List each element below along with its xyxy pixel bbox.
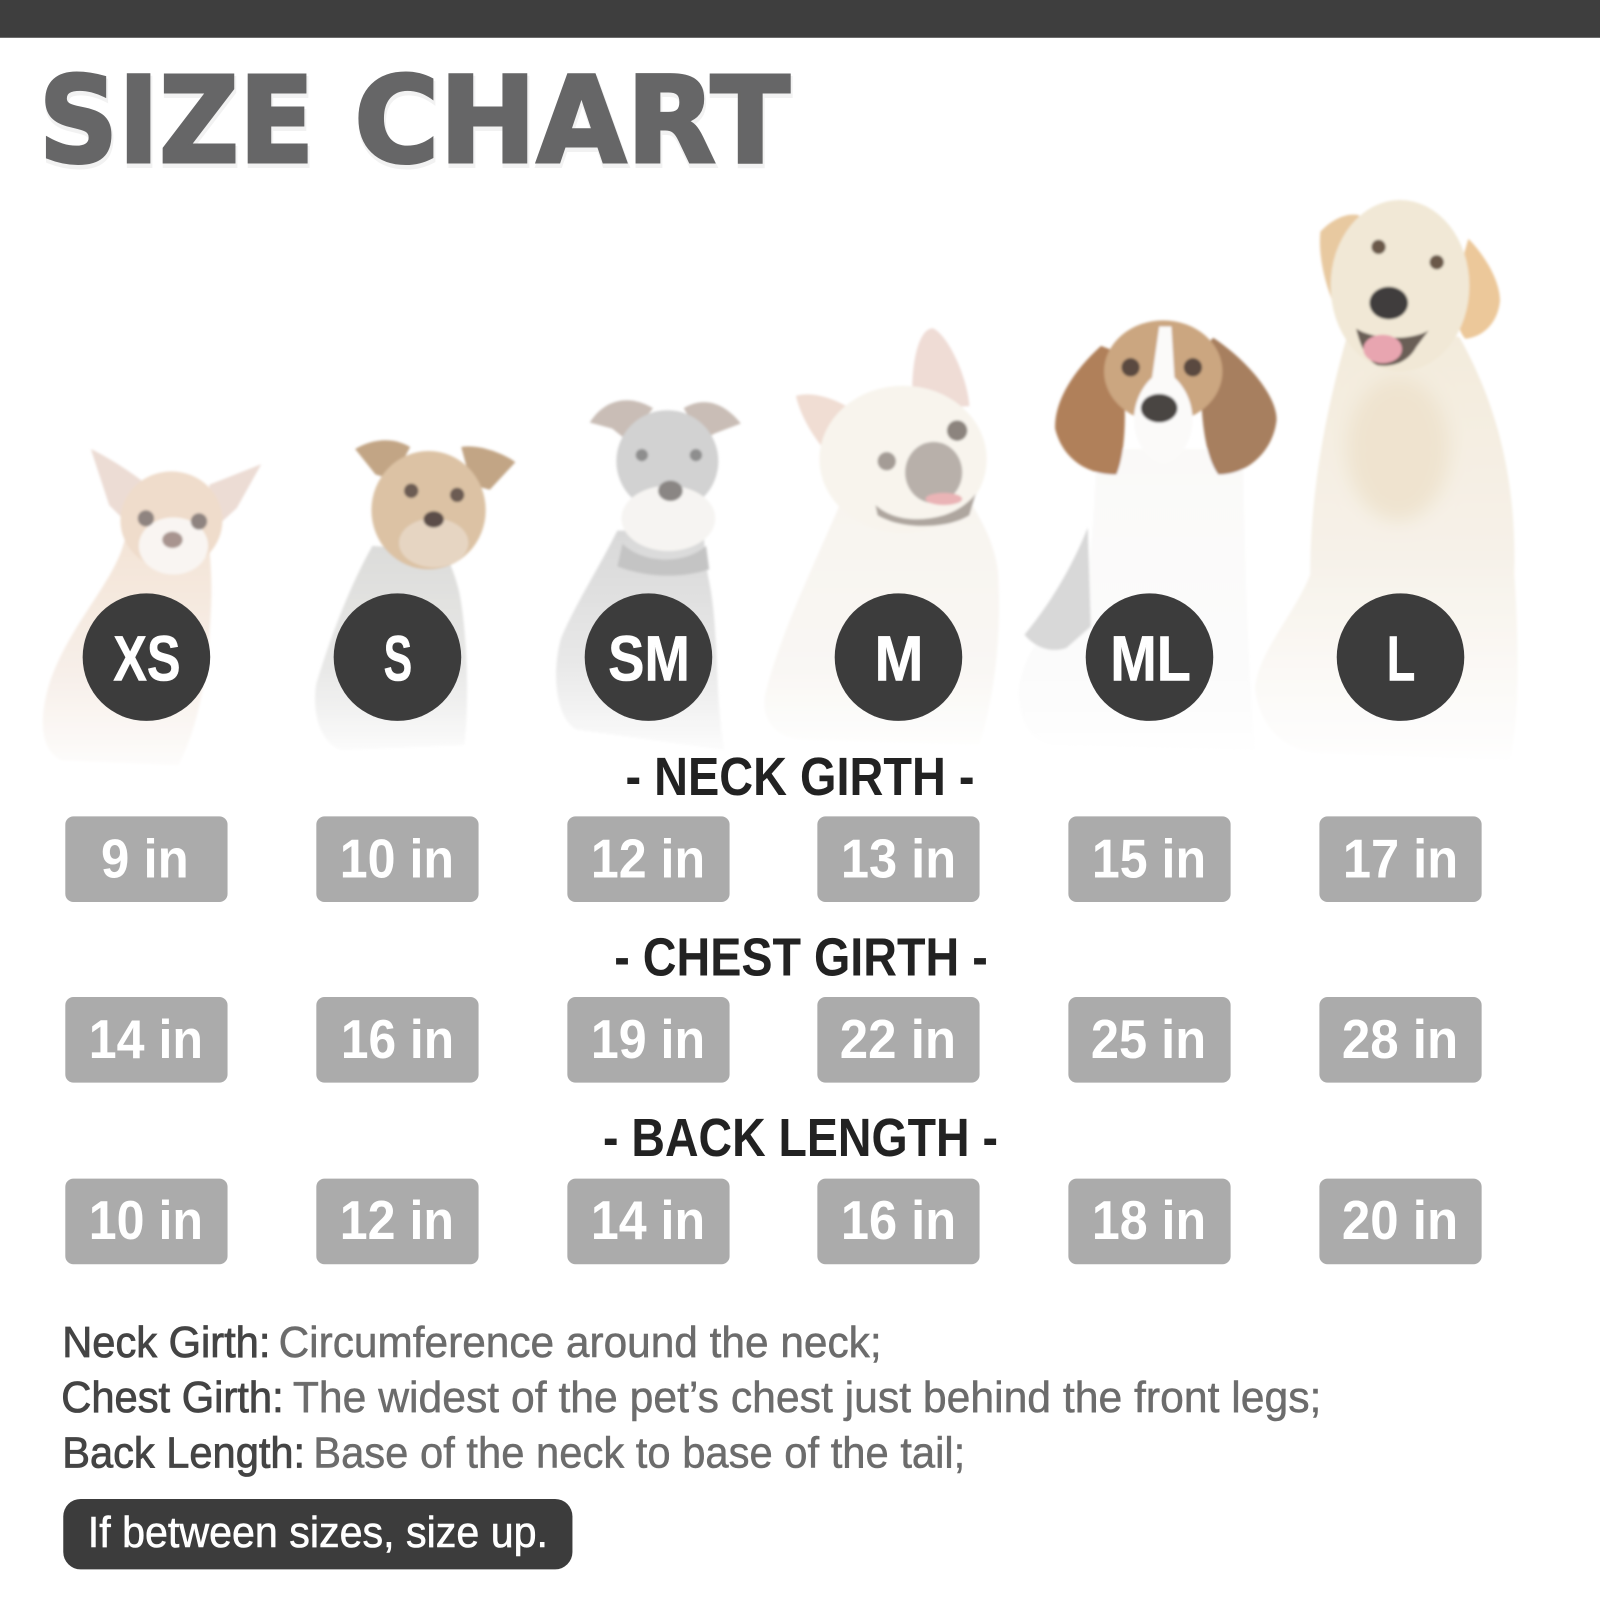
heading: chest girth: - CHEST GIRTH - [614,928,988,988]
back ML: 18 in [1092,1189,1206,1251]
back ML [1068,1179,1231,1264]
callout: if between sizes: If between sizes, size up. [88,1508,548,1557]
definition: back length: Base of the neck to base of the tail; [313,1428,965,1477]
neck S: 10 in [340,828,454,890]
neck ML: 15 in [1092,828,1206,890]
neck L [1319,816,1482,902]
definition: chest girth: The widest of the pet’s chest just behind the front legs; [293,1373,1321,1422]
size badge: ML [1086,593,1213,721]
size badge: XS: XS [113,623,181,695]
chest XS: 14 in [89,1008,203,1070]
chest ML: 25 in [1091,1008,1206,1070]
back M: 16 in [841,1189,956,1251]
chest L: 28 in [1342,1008,1458,1070]
chest L [1319,997,1482,1083]
neck SM: 12 in [591,828,705,890]
neck XS: 9 in [101,828,189,890]
neck ML [1068,816,1231,902]
size badge: M: M [874,623,923,695]
back SM [567,1179,730,1264]
back S [316,1179,479,1264]
neck M: 13 in [841,828,956,890]
chest SM [567,997,730,1083]
definition: back length: Back Length: [62,1428,305,1477]
size badge: S: S [384,623,412,695]
chest ML [1068,997,1231,1083]
chest M: 22 in [840,1008,956,1070]
neck SM [567,816,730,902]
chest SM: 19 in [591,1008,705,1070]
back L [1319,1179,1482,1264]
definition: neck girth: Neck Girth: [62,1318,270,1367]
size badge: ML: ML [1110,623,1191,695]
size badge: M [835,593,962,721]
back L: 20 in [1342,1189,1458,1251]
dog photo: beagle ML [1018,320,1277,750]
size badge: L: L [1387,623,1415,695]
title: CHART [354,52,790,191]
definition: chest girth: Chest Girth: [61,1373,284,1422]
back length row [65,1179,1482,1264]
dog photo: schnauzer SM [556,400,741,750]
back S: 12 in [340,1189,454,1251]
dog photo: yorkie S [315,440,515,750]
dog photo: chihuahua XS [43,449,261,765]
back SM: 14 in [591,1189,705,1251]
dog photo: golden retriever L [1255,200,1518,760]
back XS: 10 in [89,1189,203,1251]
heading: back length: - BACK LENGTH - [603,1108,998,1168]
chest XS [65,997,228,1083]
back M [817,1179,980,1264]
title: SIZE [39,52,314,191]
chest S: 16 in [341,1008,454,1070]
title: SIZE [40,55,315,194]
neck girth row [65,816,1482,902]
size badge: S [334,593,461,721]
neck M [817,816,980,902]
back XS [65,1179,228,1264]
top bar [0,0,1600,38]
size badge: L [1337,593,1464,721]
neck S [316,816,479,902]
definition: neck girth: Circumference around the neck; [279,1318,882,1367]
size badge: SM: SM [608,623,690,695]
neck XS [65,816,228,902]
chest girth row [65,997,1482,1083]
chest S [316,997,479,1083]
size badge: SM [585,593,712,721]
title: CHART [355,55,791,194]
definition: back length [62,1428,965,1477]
neck L: 17 in [1343,828,1458,890]
title [39,52,791,194]
dog photo: french bulldog M [764,328,999,745]
chest M [817,997,980,1083]
size badge: XS [83,593,210,721]
heading: neck girth: - NECK GIRTH - [626,747,974,807]
callout: if between sizes [63,1499,572,1569]
